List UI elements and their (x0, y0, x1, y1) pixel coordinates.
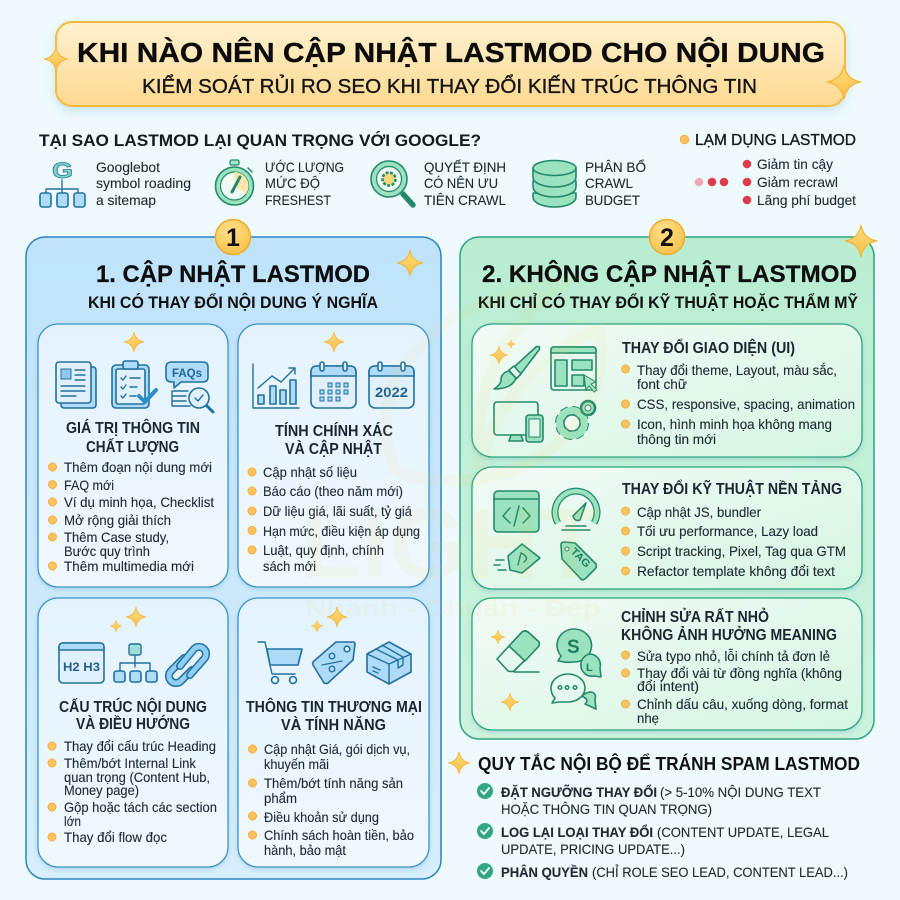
icon: chat bubbles: S (567, 637, 580, 658)
rule 1: (> 5-10% NỘI DUNG TEXT (660, 784, 821, 800)
card heading: VÀ TÍNH NĂNG (281, 715, 386, 734)
icon: heading window: H2 H3 (63, 660, 100, 674)
card: quality information (38, 324, 228, 587)
panel 2 subtitle: KHI CHỈ CÓ THAY ĐỔI KỸ THUẬT HOẶC THẨM MỸ (478, 292, 858, 312)
section: internal rules (448, 752, 860, 880)
bullet list: CSS, responsive, spacing, animation (637, 396, 855, 412)
bullet list: Bước quy trình (64, 543, 150, 559)
bullet list: Chính sách hoàn tiền, bảo (264, 827, 414, 843)
bullet list: Script tracking, Pixel, Tag qua GTM (637, 543, 846, 559)
icon: box (367, 642, 411, 684)
subtitle: KIỂM SOÁT RỦI RO SEO KHI THAY ĐỔI KIẾN TRÚC THÔNG TIN (142, 74, 757, 98)
icon: code window (494, 491, 539, 532)
bullet list: FAQ mới (64, 477, 114, 493)
badge 1 (216, 220, 250, 254)
icon: calendar grid (311, 362, 356, 408)
bullet list: thông tin mới (637, 431, 716, 447)
callout: lastmod abuse: LẠM DỤNG LASTMOD (695, 132, 856, 149)
rule 2: LOG LẠI LOẠI THAY ĐỔI (501, 823, 653, 840)
rule 2: (CONTENT UPDATE, LEGAL (657, 824, 829, 840)
icon: stars (311, 607, 347, 632)
bullet list: Refactor template không đổi text (637, 563, 835, 579)
rules heading: QUY TẮC NỘI BỘ ĐỂ TRÁNH SPAM LASTMOD (478, 753, 860, 774)
icon: calendar 2022 (369, 362, 414, 408)
panel 1 subtitle: KHI CÓ THAY ĐỔI NỘI DUNG Ý NGHĨA (88, 292, 378, 312)
bullet list: Báo cáo (theo năm mới) (263, 483, 403, 499)
bullet list: lớn (64, 813, 81, 829)
panel 1: update lastmod (26, 220, 441, 879)
bullet list: Chỉnh dấu câu, xuống dòng, format (637, 696, 848, 712)
rule 3: (CHỈ ROLE SEO LEAD, CONTENT LEAD...) (592, 864, 848, 880)
heading: TẠI SAO LASTMOD LẠI QUAN TRỌNG VỚI GOOGLE? (39, 131, 481, 150)
text: googlebot (96, 159, 191, 208)
callout: lastmod abuse (680, 132, 856, 208)
icon: chat bubbles (551, 629, 601, 709)
bullet list (248, 741, 414, 858)
card: commercial information (238, 598, 429, 867)
bullet list: Thêm đoạn nội dung mới (64, 459, 212, 475)
icon: layout window (551, 347, 597, 392)
panel 2: do not update lastmod (460, 220, 877, 739)
rule 3: PHÂN QUYỀN (501, 863, 588, 880)
title: KHI NÀO NÊN CẬP NHẬT LASTMOD CHO NỘI DUNG (77, 36, 825, 68)
text: crawl priority: QUYẾT ĐỊNH (424, 159, 506, 175)
bullet list: Hạn mức, điều kiện áp dụng (263, 523, 420, 539)
icon: eraser (497, 631, 539, 672)
rule 2 (477, 823, 829, 857)
bullet list: Thêm/bớt tính năng sản (264, 775, 403, 791)
icon: tag label: TAG (568, 546, 593, 570)
rule 3 (477, 863, 848, 880)
bullet list: Sửa typo nhỏ, lỗi chính tả đơn lẻ (637, 648, 830, 664)
icon: star (397, 250, 423, 276)
icon: stopwatch (216, 160, 254, 205)
badge 2 (650, 220, 684, 254)
icon: speed gauge (555, 491, 597, 530)
rule 2: UPDATE, PRICING UPDATE...) (501, 841, 685, 857)
card heading (246, 697, 422, 734)
icon: googlebot sitemap (40, 158, 85, 207)
card: platform technical changes (472, 467, 862, 589)
text: crawl budget (585, 158, 646, 208)
bullet list: Thêm/bớt Internal Link (64, 755, 197, 771)
icon: stars (491, 630, 519, 711)
bullet list (248, 464, 420, 574)
rule 1 (477, 783, 821, 817)
card: ui changes (472, 324, 862, 457)
text: crawl budget: BUDGET (585, 192, 640, 208)
callout: lastmod abuse: Giảm tin cậy (757, 156, 833, 172)
text: googlebot: Googlebot (96, 159, 160, 175)
icon: database (533, 160, 576, 207)
icon: moving tag (494, 544, 540, 573)
section: why lastmod matters (39, 131, 646, 208)
bullet list (622, 362, 855, 447)
card heading (275, 421, 393, 458)
bullet list: đổi intent) (637, 678, 699, 694)
bullet list: font chữ (637, 376, 687, 392)
bullet list: Tối ưu performance, Lazy load (637, 523, 818, 539)
icon: gears (560, 401, 595, 436)
bullet list: nhẹ (637, 710, 659, 726)
icon: clipboard (112, 361, 156, 408)
icon: magnifier with gear (371, 161, 413, 205)
bullet list: Thêm Case study, (64, 529, 169, 545)
icon: stars (110, 607, 146, 632)
panel 2 title: 2. KHÔNG CẬP NHẬT LASTMOD (482, 260, 857, 288)
text: googlebot: a sitemap (96, 192, 156, 208)
card heading: VÀ ĐIỀU HƯỚNG (76, 714, 190, 733)
badge 2: 2 (660, 224, 674, 252)
bullet list: Icon, hình minh họa không mang (637, 416, 832, 432)
bullet list (622, 504, 846, 579)
bullet list: Cập nhật JS, bundler (637, 504, 761, 520)
bullet list: Money page) (64, 782, 139, 798)
bullet list: Luật, quy định, chính (263, 542, 384, 558)
bullet list: Thay đổi theme, Layout, màu sắc, (637, 362, 837, 378)
panel 1 title: 1. CẬP NHẬT LASTMOD (96, 260, 370, 288)
text: crawl priority: CÓ NÊN ƯU (424, 175, 498, 191)
bullet list: quan trọng (Content Hub, (64, 769, 210, 785)
bullet list: khuyến mãi (264, 756, 329, 772)
card heading: CẤU TRÚC NỘI DUNG (59, 697, 207, 716)
bullet list: sách mới (263, 558, 316, 574)
bullet list: hành, bảo mật (264, 842, 346, 858)
bullet list: Điều khoản sử dụng (264, 809, 379, 825)
text: crawl priority: TIÊN CRAWL (424, 192, 506, 208)
bullet list: Thay đổi flow đọc (64, 829, 167, 845)
card heading: CHỈNH SỬA RẤT NHỎ (621, 608, 769, 626)
card heading: CHẤT LƯỢNG (86, 437, 179, 456)
icon: chain link (169, 647, 206, 683)
icon: tag label (561, 542, 596, 580)
bullet list (48, 459, 214, 574)
text: freshness: FRESHEST (265, 192, 331, 208)
icon: calendar 2022: 2022 (375, 385, 408, 400)
icon: brush and stars (490, 340, 540, 389)
icon: document (56, 362, 96, 408)
text: crawl priority (424, 159, 506, 208)
card: content structure (38, 598, 228, 867)
bullet list: phẩm (264, 790, 297, 806)
text: crawl budget: PHÂN BỔ (585, 158, 646, 175)
card heading (66, 418, 200, 456)
bullet list: Thay đổi vài từ đồng nghĩa (không (637, 665, 842, 681)
bullet list (622, 648, 848, 726)
text: googlebot: symbol roading (96, 175, 191, 191)
icon: growth chart (253, 364, 299, 408)
card heading (621, 608, 837, 644)
card heading: THAY ĐỔI GIAO DIỆN (UI) (622, 339, 795, 357)
icon: star (324, 332, 344, 352)
icon: discount tag (313, 642, 355, 684)
rule 1: HOẶC THÔNG TIN QUAN TRỌNG) (501, 801, 712, 817)
text: freshness (265, 159, 344, 208)
bullet list: Cập nhật số liệu (263, 464, 357, 480)
badge 1: 1 (226, 224, 240, 252)
card heading: KHÔNG ẢNH HƯỞNG MEANING (621, 626, 837, 644)
icon: devices (494, 402, 543, 442)
icon: hierarchy (114, 644, 157, 682)
card: accuracy and updates (238, 324, 429, 587)
watermark logo (300, 285, 601, 621)
icon: faq search: FAQs (172, 368, 202, 380)
icon: heading window (59, 643, 104, 683)
rule 1: ĐẶT NGƯỠNG THAY ĐỔI (501, 783, 657, 800)
card heading: THÔNG TIN THƯƠNG MẠI (246, 697, 422, 716)
icon: shopping cart (258, 642, 302, 684)
icon: star (448, 752, 470, 774)
bullet list: Thêm multimedia mới (64, 558, 194, 574)
callout: lastmod abuse: Lãng phí budget (757, 192, 856, 208)
text: crawl budget: CRAWL (585, 175, 633, 191)
bullet list: Gộp hoặc tách các section (64, 799, 217, 815)
icon: googlebot sitemap: G (52, 158, 73, 183)
bullet list: Ví dụ minh họa, Checklist (64, 494, 214, 510)
icon: chat bubbles: L (586, 662, 593, 674)
card heading (59, 697, 207, 733)
card heading: GIÁ TRỊ THÔNG TIN (66, 418, 200, 437)
icon: star (845, 225, 877, 257)
text: freshness: MỨC ĐỘ (265, 175, 320, 191)
card: very small edits (472, 598, 862, 730)
icon: right star (827, 65, 861, 99)
text: freshness: ƯỚC LƯỢNG (265, 159, 344, 175)
card heading: VÀ CẬP NHẬT (285, 439, 382, 458)
bullet list: Mở rộng giải thích (64, 512, 171, 528)
callout: lastmod abuse: Giảm recrawl (757, 174, 838, 190)
bullet list: Cập nhật Giá, gói dịch vụ, (264, 741, 410, 757)
icon: faq search (166, 362, 213, 412)
icon: left star (44, 47, 68, 71)
card heading: TÍNH CHÍNH XÁC (275, 421, 393, 440)
bullet list (48, 738, 217, 845)
icon: star (124, 332, 144, 352)
title banner (44, 22, 861, 106)
watermark logo: LIGHT (300, 488, 600, 600)
watermark logo: Nhanh - Chuẩn - Đẹp (305, 595, 601, 621)
bullet list: Dữ liệu giá, lãi suất, tỷ giá (263, 503, 412, 519)
card heading: THAY ĐỔI KỸ THUẬT NỀN TẢNG (622, 480, 842, 498)
bullet list: Thay đổi cấu trúc Heading (64, 738, 216, 754)
